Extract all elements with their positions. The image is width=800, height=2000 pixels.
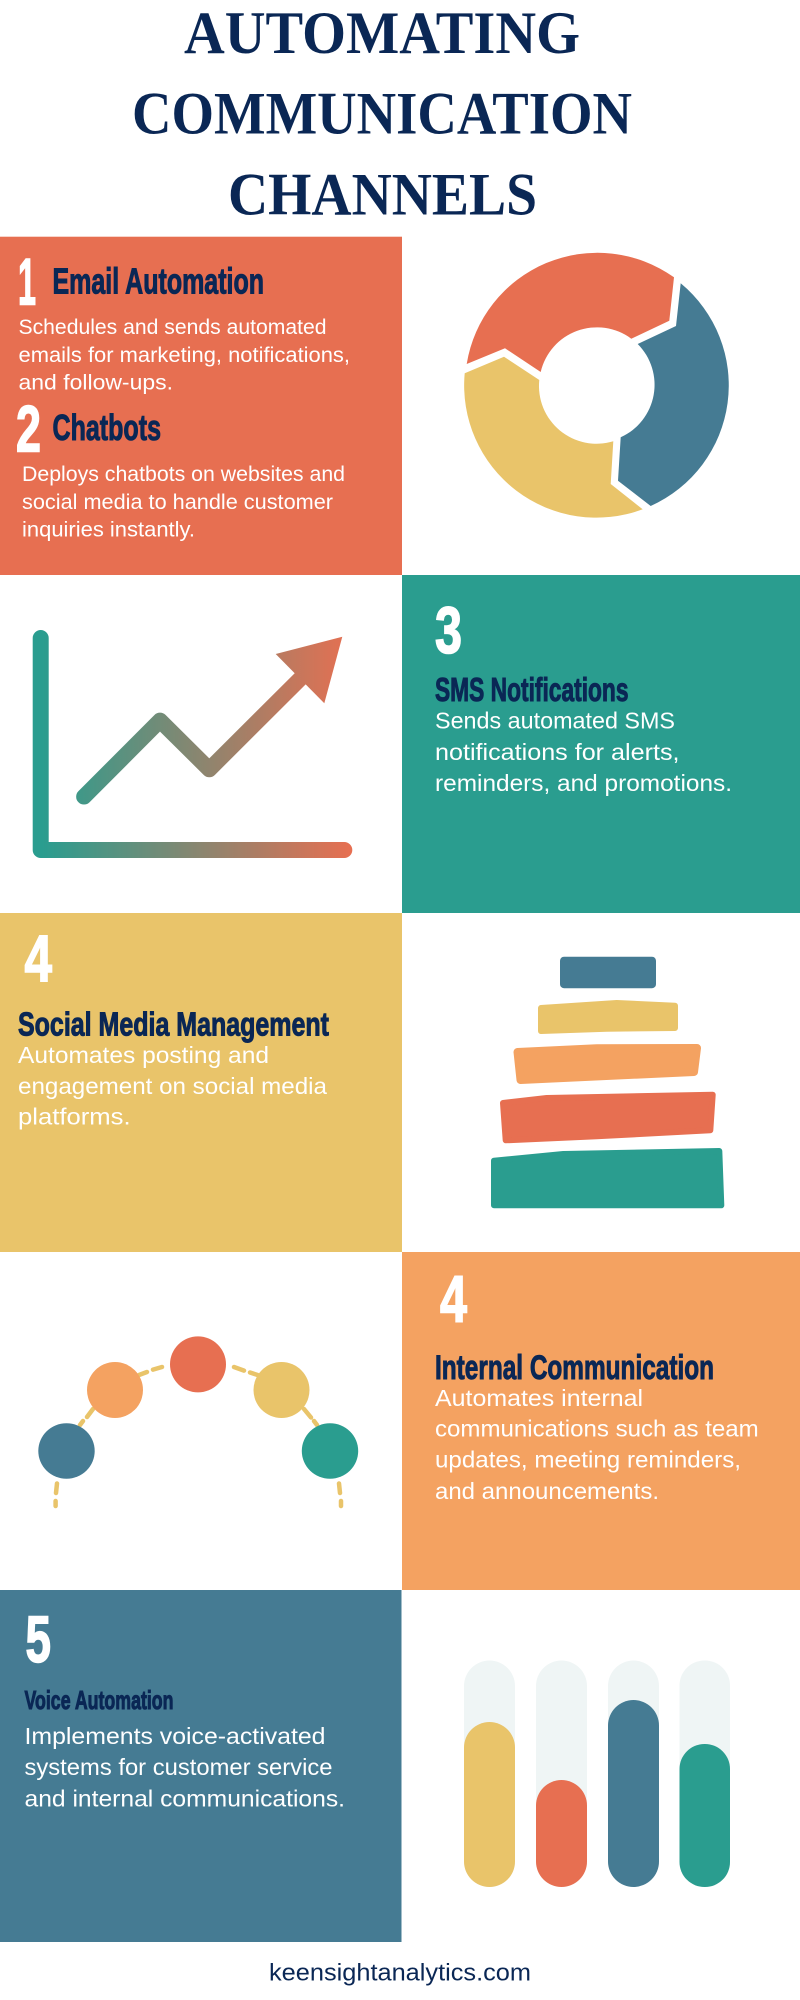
text: sms description: notifications for alerts, bbox=[435, 739, 680, 765]
heading: social media management: Social Media Management bbox=[18, 1006, 329, 1043]
pyramid bar: teal bbox=[494, 1151, 721, 1205]
pyramid bar: yellow bbox=[541, 1003, 675, 1031]
diagram: arc of connected circles bbox=[38, 1336, 358, 1506]
panel: social media management bbox=[0, 913, 402, 1252]
bar 3: blue bbox=[608, 1660, 659, 1887]
text: voice automation description: Implements voice-activated bbox=[24, 1723, 326, 1749]
bar 1: yellow bbox=[464, 1660, 515, 1887]
chart axes bbox=[41, 638, 344, 850]
text: social media description: platforms. bbox=[18, 1104, 131, 1130]
number 3: 3 bbox=[435, 593, 462, 667]
text: sms description bbox=[435, 708, 732, 796]
text: internal communication description: and announcements. bbox=[435, 1478, 659, 1504]
text: email automation description: Schedules and sends automated bbox=[18, 316, 327, 339]
title: COMMUNICATION bbox=[132, 80, 632, 146]
circle: yellow bbox=[254, 1362, 310, 1418]
chart: circular donut with three arrows bbox=[464, 253, 729, 518]
bar 4: teal bbox=[680, 1660, 730, 1887]
text: chatbots description: inquiries instantly. bbox=[22, 518, 195, 542]
text: email automation description: and follow-ups. bbox=[18, 372, 173, 394]
text: chatbots description: Deploys chatbots on websites and bbox=[22, 463, 345, 486]
pyramid bar: orange bbox=[518, 1048, 697, 1080]
title: AUTOMATING bbox=[184, 0, 580, 66]
footer: website: keensightanalytics.com bbox=[269, 1960, 531, 1986]
title: CHANNELS bbox=[228, 162, 537, 228]
number 4: 4 bbox=[440, 1262, 467, 1336]
number 5: 5 bbox=[26, 1602, 51, 1676]
text: internal communication description: communications such as team bbox=[435, 1416, 759, 1442]
text: voice automation description: and internal communications. bbox=[24, 1786, 345, 1812]
donut segment: blue bbox=[618, 283, 729, 506]
heading: voice automation: Voice Automation bbox=[24, 1685, 174, 1715]
donut segment: yellow bbox=[464, 357, 643, 518]
number 4: 4 bbox=[24, 921, 52, 995]
text: internal communication description: updates, meeting reminders, bbox=[435, 1447, 741, 1473]
circle: red bbox=[170, 1336, 226, 1392]
text: sms description: reminders, and promotions. bbox=[435, 770, 732, 796]
heading: chatbots: Chatbots bbox=[52, 407, 161, 448]
circle: orange bbox=[87, 1362, 143, 1418]
panel: internal communication bbox=[402, 1252, 800, 1590]
text: sms description: Sends automated SMS bbox=[435, 708, 675, 734]
text: chatbots description: social media to handle customer bbox=[22, 491, 333, 514]
text: social media description: Automates posting and bbox=[18, 1042, 269, 1068]
chart: vertical pill bars bbox=[464, 1660, 730, 1887]
rising trend line bbox=[84, 677, 302, 797]
text: voice automation description: systems for customer service bbox=[24, 1754, 332, 1780]
text: social media description bbox=[18, 1042, 327, 1130]
circle: blue bbox=[38, 1423, 95, 1479]
text: email automation description bbox=[18, 316, 350, 394]
title bbox=[132, 0, 632, 228]
number 2: 2 bbox=[16, 392, 41, 466]
panel: voice automation bbox=[0, 1590, 402, 1942]
arrow head bbox=[276, 637, 342, 703]
text: email automation description: emails for marketing, notifications, bbox=[18, 344, 350, 367]
circle: teal bbox=[302, 1423, 358, 1479]
pyramid bar: blue bbox=[560, 957, 656, 988]
pyramid bar: red bbox=[503, 1095, 713, 1140]
chart: stacked pyramid bars bbox=[494, 957, 721, 1205]
text: social media description: engagement on social media bbox=[18, 1073, 327, 1099]
panel: email automation and chatbots bbox=[0, 237, 402, 575]
text: internal communication description bbox=[435, 1385, 759, 1504]
panel: email automation and chatbots: 1 bbox=[18, 244, 36, 318]
text: internal communication description: Automates internal bbox=[435, 1385, 643, 1411]
donut segment: red bbox=[467, 253, 674, 372]
bar 2: red bbox=[536, 1660, 587, 1887]
text: voice automation description bbox=[24, 1723, 345, 1812]
panel: sms notifications bbox=[402, 575, 800, 913]
heading: sms notifications: SMS Notifications bbox=[435, 671, 628, 708]
dashed connector arc bbox=[56, 1367, 341, 1506]
text: chatbots description bbox=[22, 463, 345, 542]
heading: email automation: Email Automation bbox=[52, 260, 264, 302]
chart: rising line with arrow bbox=[41, 637, 344, 850]
